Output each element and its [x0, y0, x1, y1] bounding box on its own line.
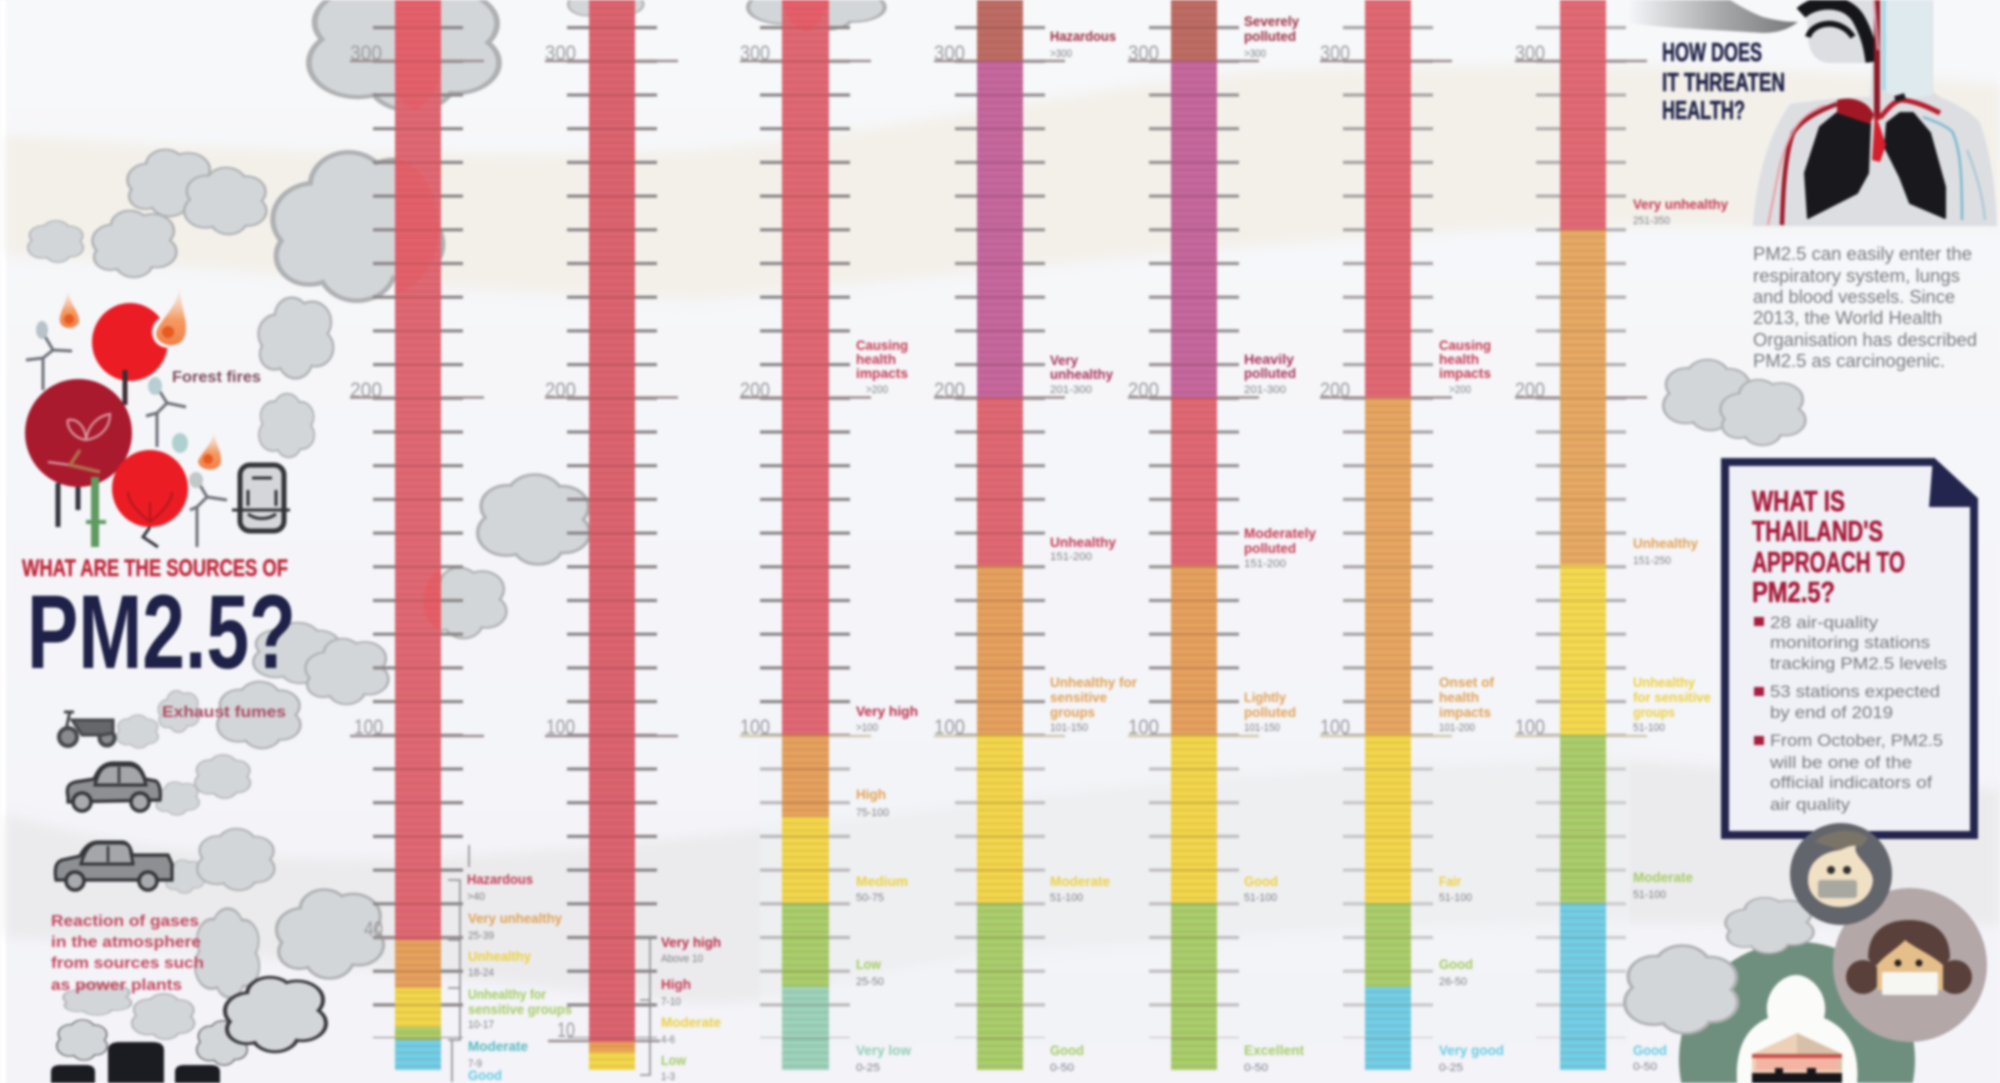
- gauge 6 labels: 101-200: [1439, 722, 1475, 734]
- health text block: respiratory system, lungs: [1753, 266, 1960, 286]
- gauge 6 labels: >200: [1449, 384, 1471, 396]
- gauge 7 labels: 0-50: [1633, 1061, 1657, 1073]
- gauge 2 labels: Moderate: [661, 1014, 721, 1030]
- gauge 7 labels: Good: [1633, 1042, 1667, 1058]
- gauge 3 labels: [856, 337, 918, 1074]
- gauge 4 labels: Unhealthy: [1050, 534, 1116, 550]
- gauge 5 labels: Severely: [1244, 13, 1299, 29]
- gauge 7 labels: 51-100: [1633, 722, 1665, 734]
- gauge 6 labels: health: [1439, 351, 1479, 367]
- gauge 3 labels: Very high: [856, 703, 918, 719]
- gauge 5 labels: Excellent: [1244, 1042, 1304, 1058]
- gauge 7 labels: 251-350: [1633, 215, 1670, 227]
- gauge 1 labels: >40: [467, 891, 485, 903]
- heading: how does it threaten health: [1662, 37, 1785, 125]
- gauge 4 labels: Moderate: [1050, 873, 1110, 889]
- gauge 3: [782, 0, 829, 1070]
- tick scale: ticks for all gauges: [373, 26, 1630, 1045]
- panel: Thailand's approach: monitoring stations: [1770, 633, 1930, 652]
- illustration: burning forest: [25, 288, 227, 547]
- axis numbers: 100: [1128, 716, 1159, 739]
- health text block: 2013, the World Health: [1753, 308, 1942, 328]
- reaction of gases text block: from sources such: [51, 955, 204, 972]
- gauge 2 labels: Above 10: [661, 953, 703, 965]
- gauge 6 labels: 0-25: [1439, 1062, 1463, 1074]
- reaction of gases text block: in the atmosphere: [51, 934, 201, 951]
- axis numbers: 100: [354, 716, 383, 739]
- panel: Thailand's approach: by end of 2019: [1770, 703, 1893, 722]
- axis numbers: 100: [934, 716, 965, 739]
- gauge 6 labels: Onset of: [1439, 674, 1494, 690]
- reaction of gases text block: [51, 913, 204, 994]
- gauge 5 labels: Heavily: [1244, 351, 1294, 367]
- gauge 4 labels: 51-100: [1050, 892, 1083, 904]
- gauge 4 labels: 0-50: [1050, 1062, 1074, 1074]
- gauge 2 labels: Low: [661, 1052, 686, 1068]
- gauge 5 labels: 101-150: [1244, 722, 1280, 734]
- gauge 4 labels: Very: [1050, 352, 1078, 368]
- gauge 3 labels: >100: [856, 722, 878, 734]
- illustration: body with lungs and smoke: [1630, 0, 1997, 226]
- gauge 1 labels: Very unhealthy: [468, 910, 562, 926]
- icon: smokestacks: [51, 1042, 220, 1083]
- gauge 1 labels: 18-24: [468, 967, 494, 979]
- axis numbers: 100: [1320, 716, 1350, 739]
- gauge 3 labels: >200: [866, 384, 888, 396]
- clouds beside the portraits: [1626, 899, 1812, 1032]
- forest fires label: Forest fires: [172, 369, 261, 386]
- axis numbers: 100: [546, 716, 575, 739]
- gauge 7 labels: 151-250: [1633, 555, 1671, 567]
- panel: Thailand's approach: WHAT IS: [1752, 486, 1845, 518]
- gauge 2 labels: 1-3: [661, 1071, 675, 1083]
- gauge 3 labels: Very low: [856, 1042, 911, 1058]
- gauge 6 labels: Very good: [1439, 1042, 1504, 1058]
- exhaust fumes label: Exhaust fumes: [162, 704, 286, 721]
- panel: Thailand's approach: tracking PM2.5 levels: [1770, 654, 1947, 673]
- axis numbers: 300: [1320, 42, 1350, 65]
- left page margin: [0, 0, 6, 1083]
- gauge 4 labels: Hazardous: [1050, 28, 1116, 44]
- axis numbers: 200: [350, 379, 382, 402]
- gauge 4 labels: [1050, 28, 1138, 1074]
- gauge 1 labels: [467, 871, 572, 1083]
- beige haze band: [6, 66, 2000, 300]
- grey haze band: [6, 758, 2000, 1003]
- gauge 4 labels: sensitive: [1050, 689, 1107, 705]
- exhaust and smokestack clouds: [58, 683, 382, 1065]
- gauge 4: [977, 0, 1023, 1070]
- gauge 1 labels: Good: [468, 1067, 502, 1083]
- reaction of gases text block: as power plants: [51, 977, 182, 994]
- panel: Thailand's approach: air quality: [1770, 795, 1851, 814]
- gauge 5: [1171, 0, 1217, 1070]
- panel: Thailand's approach: official indicators of: [1770, 773, 1932, 792]
- clouds behind gauges: [29, 0, 1804, 703]
- gauge 3 labels: 75-100: [856, 807, 889, 819]
- icon: car top view: [232, 465, 290, 531]
- gauge 3 labels: impacts: [856, 365, 908, 381]
- gauge 3 labels: Low: [856, 956, 881, 972]
- heading: what are the sources of: WHAT ARE THE SOURCES OF: [22, 555, 288, 582]
- heading: how does it threaten health: HOW DOES: [1662, 37, 1762, 67]
- gauge 1 labels: 7-9: [468, 1058, 482, 1070]
- portrait: child with mask: [1790, 823, 1892, 925]
- health text block: Organisation has described: [1753, 330, 1977, 350]
- panel: Thailand's approach: [1725, 458, 1978, 835]
- gauge 5 labels: >300: [1244, 48, 1266, 60]
- icon: car: [67, 763, 160, 811]
- gauge 6 labels: [1439, 337, 1504, 1074]
- gauge 6 labels: Fair: [1439, 873, 1461, 889]
- gauge 4 labels: groups: [1050, 704, 1095, 720]
- gauge 6 labels: health: [1439, 689, 1479, 705]
- panel: Thailand's approach: APPROACH TO: [1752, 547, 1905, 579]
- gauge 1 labels: Unhealthy: [468, 948, 531, 964]
- gauge 2 labels: 7-10: [661, 996, 681, 1008]
- gauge 2 labels: High: [661, 976, 691, 992]
- gauge 3 labels: 25-50: [856, 976, 884, 988]
- panel: Thailand's approach: will be one of the: [1769, 753, 1912, 772]
- gauge 3 labels: High: [856, 786, 886, 802]
- gauge 6: [1365, 0, 1411, 1070]
- gauge 5 labels: Moderately: [1244, 525, 1316, 541]
- gauge 1 labels: Hazardous: [467, 871, 533, 887]
- gauge 5 labels: polluted: [1244, 540, 1296, 556]
- gauge 1 labels: Moderate: [468, 1038, 528, 1054]
- axis numbers: 200: [740, 379, 770, 402]
- axis numbers: 300: [740, 42, 770, 65]
- gauge 2 labels: 4-6: [661, 1034, 675, 1046]
- axis numbers: [350, 42, 1545, 1042]
- gauge 2 labels: [661, 934, 721, 1083]
- gauge 7 labels: groups: [1633, 704, 1675, 720]
- axis numbers: 300: [545, 42, 576, 65]
- gauge 4 labels: unhealthy: [1050, 366, 1113, 382]
- gauge 5 labels: Good: [1244, 873, 1278, 889]
- axis numbers: 200: [545, 379, 576, 402]
- major axis lines at 300, 200 and 100: [350, 61, 1647, 1041]
- axis numbers: 40: [364, 918, 383, 941]
- gauge 7 labels: Unhealthy: [1633, 674, 1695, 690]
- gauge 6 labels: 26-50: [1439, 976, 1467, 988]
- gauge 7 labels: Very unhealthy: [1633, 196, 1728, 212]
- axis numbers: 10: [557, 1019, 575, 1042]
- health text block: PM2.5 as carcinogenic.: [1753, 351, 1945, 371]
- health text block: [1753, 244, 1977, 371]
- gauge 1 labels: 10-17: [468, 1019, 494, 1031]
- gauge 7: [1560, 0, 1606, 1070]
- gauge 1 labels: 25-39: [468, 930, 494, 942]
- gauge 2: [589, 0, 635, 1070]
- axis numbers: 300: [1515, 42, 1545, 65]
- gauge 6 labels: impacts: [1439, 704, 1491, 720]
- gauge 5 labels: 201-300: [1244, 384, 1286, 396]
- panel: Thailand's approach: 53 stations expected: [1770, 682, 1940, 701]
- heading: how does it threaten health: HEALTH?: [1662, 95, 1745, 125]
- gauge 5 labels: polluted: [1244, 365, 1296, 381]
- heading: PM2.5?: PM2.5?: [27, 574, 296, 691]
- gauge 4 labels: 101-150: [1050, 722, 1088, 734]
- gauge 2 labels: Very high: [661, 934, 721, 950]
- reaction of gases text block: Reaction of gases: [51, 913, 199, 930]
- gauge 4 labels: 151-200: [1050, 551, 1092, 563]
- axis numbers: 100: [740, 716, 770, 739]
- gauge 1: WHO scale: [395, 0, 441, 1070]
- gauge 5 labels: polluted: [1244, 28, 1296, 44]
- axis numbers: 200: [1128, 379, 1159, 402]
- gauge 6 labels: 51-100: [1439, 892, 1472, 904]
- gauge 4 labels: 201-300: [1050, 384, 1092, 396]
- portrait: elderly person: [1679, 942, 1915, 1083]
- icon: pickup truck: [55, 842, 172, 890]
- gauge 7 labels: Unhealthy: [1633, 535, 1698, 551]
- panel: Thailand's approach: 28 air-quality: [1770, 613, 1879, 632]
- axis numbers: 200: [1515, 379, 1545, 402]
- axis numbers: 300: [350, 42, 382, 65]
- gauge 1 bracket and arrow: [448, 845, 469, 1082]
- gauge 1 labels: sensitive groups: [468, 1001, 572, 1017]
- gauge 4 labels: Good: [1050, 1042, 1084, 1058]
- health text block: PM2.5 can easily enter the: [1753, 244, 1972, 264]
- axis numbers: 300: [1128, 42, 1159, 65]
- gauge 7 labels: for sensitive: [1633, 689, 1711, 705]
- panel: Thailand's approach: THAILAND'S: [1752, 516, 1883, 548]
- gauge 6 labels: Good: [1439, 956, 1473, 972]
- axis numbers: 200: [934, 379, 965, 402]
- gauge 2 bracket: [640, 938, 650, 1075]
- heading: how does it threaten health: IT THREATEN: [1662, 67, 1785, 97]
- gauge 5 labels: 51-100: [1244, 892, 1277, 904]
- gauge 3 labels: Medium: [856, 873, 908, 889]
- panel: Thailand's approach: PM2.5?: [1752, 577, 1835, 609]
- axis numbers: 300: [934, 42, 965, 65]
- icon: motorcycle: [59, 711, 114, 746]
- axis numbers: 100: [1515, 716, 1545, 739]
- gauge 5 labels: [1244, 13, 1316, 1074]
- gauge 3 labels: health: [856, 351, 896, 367]
- gauge 3 labels: Causing: [856, 337, 908, 353]
- gauge 4 labels: Unhealthy for: [1050, 674, 1138, 690]
- gauge 5 labels: polluted: [1244, 704, 1296, 720]
- gauge 3 labels: 50-75: [856, 892, 884, 904]
- portrait: girl with mask: [1833, 888, 1987, 1042]
- gauge 5 labels: 151-200: [1244, 558, 1286, 570]
- gauge 1 labels: Unhealthy for: [468, 986, 546, 1002]
- gauge 7 labels: Moderate: [1633, 869, 1693, 885]
- health text block: and blood vessels. Since: [1753, 287, 1955, 307]
- gauge 3 labels: 0-25: [856, 1062, 880, 1074]
- gauge 6 labels: impacts: [1439, 365, 1491, 381]
- gauge 7 labels: [1633, 196, 1728, 1073]
- axis numbers: 200: [1320, 379, 1350, 402]
- panel: Thailand's approach: From October, PM2.5: [1770, 731, 1943, 750]
- gauge 5 labels: Lightly: [1244, 689, 1286, 705]
- gauge 5 labels: 0-50: [1244, 1062, 1268, 1074]
- gauge 7 labels: 51-100: [1633, 889, 1666, 901]
- gauge 6 labels: Causing: [1439, 337, 1491, 353]
- gauge 4 labels: >300: [1050, 48, 1072, 60]
